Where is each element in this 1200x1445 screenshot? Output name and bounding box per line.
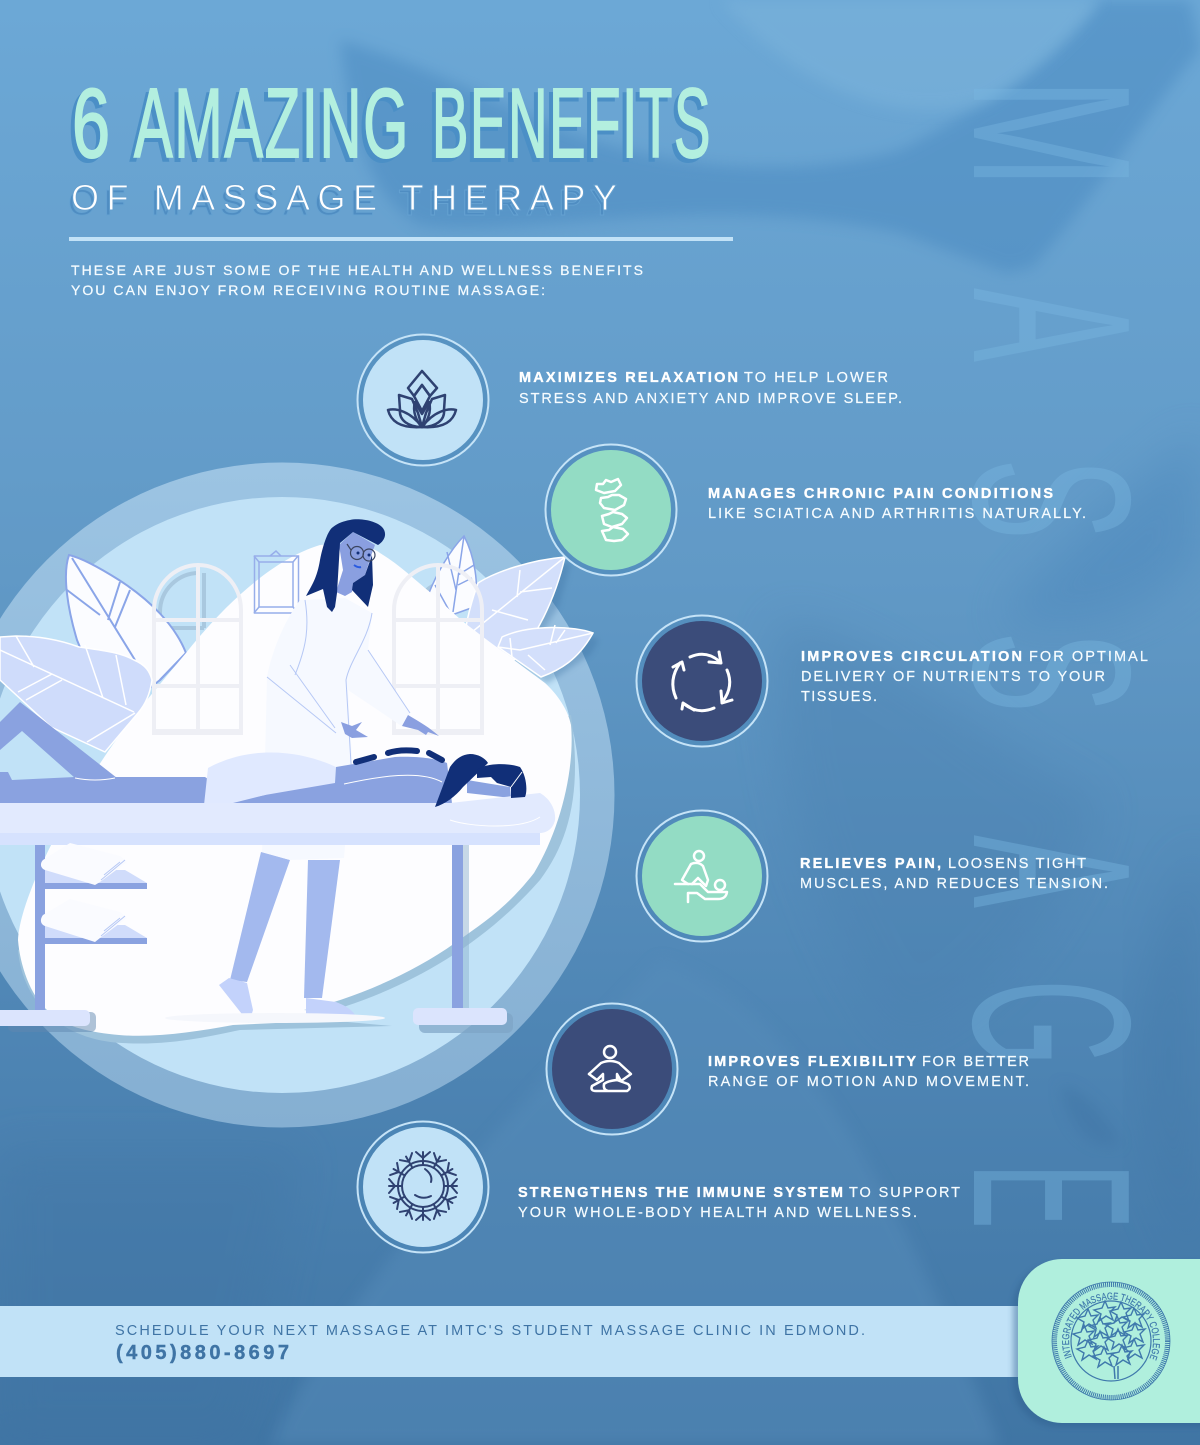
text: flexibility bbox=[708, 1054, 1029, 1090]
illustration: massage scene bbox=[0, 462, 614, 1128]
text: circulation bbox=[801, 649, 1148, 705]
icon: immune cell bbox=[358, 1122, 488, 1252]
leaves shadow bbox=[472, 563, 599, 684]
glasses bbox=[347, 544, 375, 561]
watermark: MASSAGE: A bbox=[926, 288, 1178, 362]
text: relaxation: TO HELP LOWER bbox=[744, 370, 888, 386]
benefit 1: relaxation bbox=[358, 334, 902, 466]
text: immune system: TO SUPPORT bbox=[849, 1185, 960, 1201]
text: pain relief: MUSCLES, AND REDUCES TENSION. bbox=[800, 876, 1108, 892]
background blob shadow bbox=[18, 715, 575, 1044]
patient hair bbox=[477, 764, 526, 798]
text: flexibility: IMPROVES FLEXIBILITY bbox=[708, 1054, 916, 1070]
icon: massage bbox=[636, 810, 768, 942]
watermark: MASSAGE: M bbox=[926, 78, 1178, 188]
table legs and shelves bbox=[0, 843, 513, 1033]
intro text: THESE ARE JUST SOME OF THE HEALTH AND WELLNESS BENEFITS bbox=[71, 262, 643, 278]
subtitle: OF MASSAGE THERAPY bbox=[71, 177, 617, 218]
intro text: YOU CAN ENJOY FROM RECEIVING ROUTINE MASSAGE: bbox=[71, 282, 545, 298]
title: AMAZING bbox=[130, 72, 406, 182]
footer bar: SCHEDULE YOUR NEXT MASSAGE AT IMTC'S STUDENT MASSAGE CLINIC IN EDMOND. bbox=[115, 1323, 865, 1339]
text: pain relief: RELIEVES PAIN, bbox=[800, 856, 941, 872]
text: immune system: STRENGTHENS THE IMMUNE SYSTEM bbox=[518, 1185, 843, 1201]
benefit 2: chronic pain bbox=[546, 444, 1086, 576]
title: BENEFITS bbox=[428, 72, 708, 182]
floor shadow bbox=[165, 1013, 385, 1023]
head bbox=[467, 780, 511, 798]
leaf: front left bbox=[0, 636, 152, 752]
towel bbox=[204, 752, 336, 805]
leaf: right upper bbox=[466, 557, 565, 660]
shoes bbox=[219, 978, 253, 1023]
icon: circular arrows bbox=[636, 616, 768, 746]
logo: college seal bbox=[1052, 1282, 1170, 1400]
text: relaxation: STRESS AND ANXIETY AND IMPROVE SLEEP. bbox=[519, 391, 902, 407]
seal tree bbox=[1073, 1301, 1145, 1379]
patient bbox=[0, 702, 555, 845]
coat bbox=[262, 598, 410, 860]
icon: spine bbox=[546, 444, 676, 576]
picture frame bbox=[254, 551, 298, 613]
watermark: MASSAGE: S bbox=[926, 631, 1178, 713]
footer bar bbox=[0, 1306, 1030, 1377]
title: 6 bbox=[72, 68, 110, 178]
hands bbox=[341, 722, 368, 738]
logo card bbox=[1010, 1259, 1200, 1425]
text: flexibility: RANGE OF MOTION AND MOVEMENT. bbox=[708, 1074, 1029, 1090]
title: BENEFITS bbox=[432, 68, 712, 178]
logo: college seal: INTEGRATED MASSAGE THERAPY COLLEGE bbox=[1062, 1292, 1160, 1361]
text: relaxation: MAXIMIZES RELAXATION bbox=[519, 370, 738, 386]
text: circulation: DELIVERY OF NUTRIENTS TO YOUR bbox=[801, 669, 1105, 685]
text: pain relief bbox=[800, 856, 1108, 892]
text: pain relief: LOOSENS TIGHT bbox=[948, 856, 1086, 872]
text: circulation: IMPROVES CIRCULATION bbox=[801, 649, 1022, 665]
text: chronic pain: MANAGES CHRONIC PAIN CONDITIONS bbox=[708, 486, 1053, 502]
title: 6 bbox=[68, 72, 106, 182]
text: immune system: YOUR WHOLE-BODY HEALTH AND WELLNESS. bbox=[518, 1205, 917, 1221]
stones bbox=[356, 750, 442, 762]
pillow and table bbox=[0, 793, 555, 845]
intro text bbox=[71, 262, 643, 298]
text: E bbox=[926, 1163, 1178, 1229]
icon: meditation bbox=[546, 1004, 678, 1134]
benefit 6: immune system bbox=[358, 1122, 960, 1252]
text: chronic pain bbox=[708, 486, 1086, 522]
lying body bbox=[0, 757, 452, 803]
text: relaxation bbox=[519, 370, 902, 407]
leaf: small right bbox=[429, 536, 476, 616]
text: flexibility: FOR BETTER bbox=[922, 1054, 1029, 1070]
watermark: MASSAGE: G bbox=[926, 979, 1178, 1067]
table feet bbox=[8, 1012, 96, 1032]
footer bar: (405)880-8697 bbox=[116, 1342, 289, 1364]
benefit 4: pain relief bbox=[636, 810, 1108, 942]
subtitle: OF MASSAGE THERAPY bbox=[68, 182, 614, 223]
text: circulation: TISSUES. bbox=[801, 689, 877, 705]
title: AMAZING bbox=[134, 68, 410, 178]
icon: lotus bbox=[358, 334, 488, 466]
watermark: MASSAGE: S bbox=[926, 458, 1178, 540]
benefit 5: flexibility bbox=[546, 1004, 1029, 1134]
windows bbox=[152, 565, 484, 735]
leaf: back left bbox=[66, 555, 186, 720]
leaf: right lower bbox=[498, 625, 593, 677]
legs bbox=[230, 852, 290, 982]
watermark: MASSAGE bbox=[926, 78, 1178, 1229]
watermark: MASSAGE: A bbox=[926, 835, 1178, 908]
hair bbox=[306, 519, 385, 612]
outer circle bbox=[0, 462, 614, 1128]
benefit 3: circulation bbox=[636, 616, 1148, 746]
window shadows bbox=[160, 573, 440, 628]
text: immune system bbox=[518, 1185, 960, 1221]
raised leg bbox=[0, 702, 117, 778]
text: chronic pain: LIKE SCIATICA AND ARTHRITIS NATURALLY. bbox=[708, 506, 1086, 522]
neck and face bbox=[336, 532, 375, 596]
background blob bbox=[18, 544, 572, 1036]
ponytail bbox=[435, 754, 488, 807]
towels bbox=[41, 843, 127, 885]
inner circle bbox=[0, 497, 580, 1093]
text: circulation: FOR OPTIMAL bbox=[1029, 649, 1148, 665]
therapist bbox=[219, 519, 439, 1023]
